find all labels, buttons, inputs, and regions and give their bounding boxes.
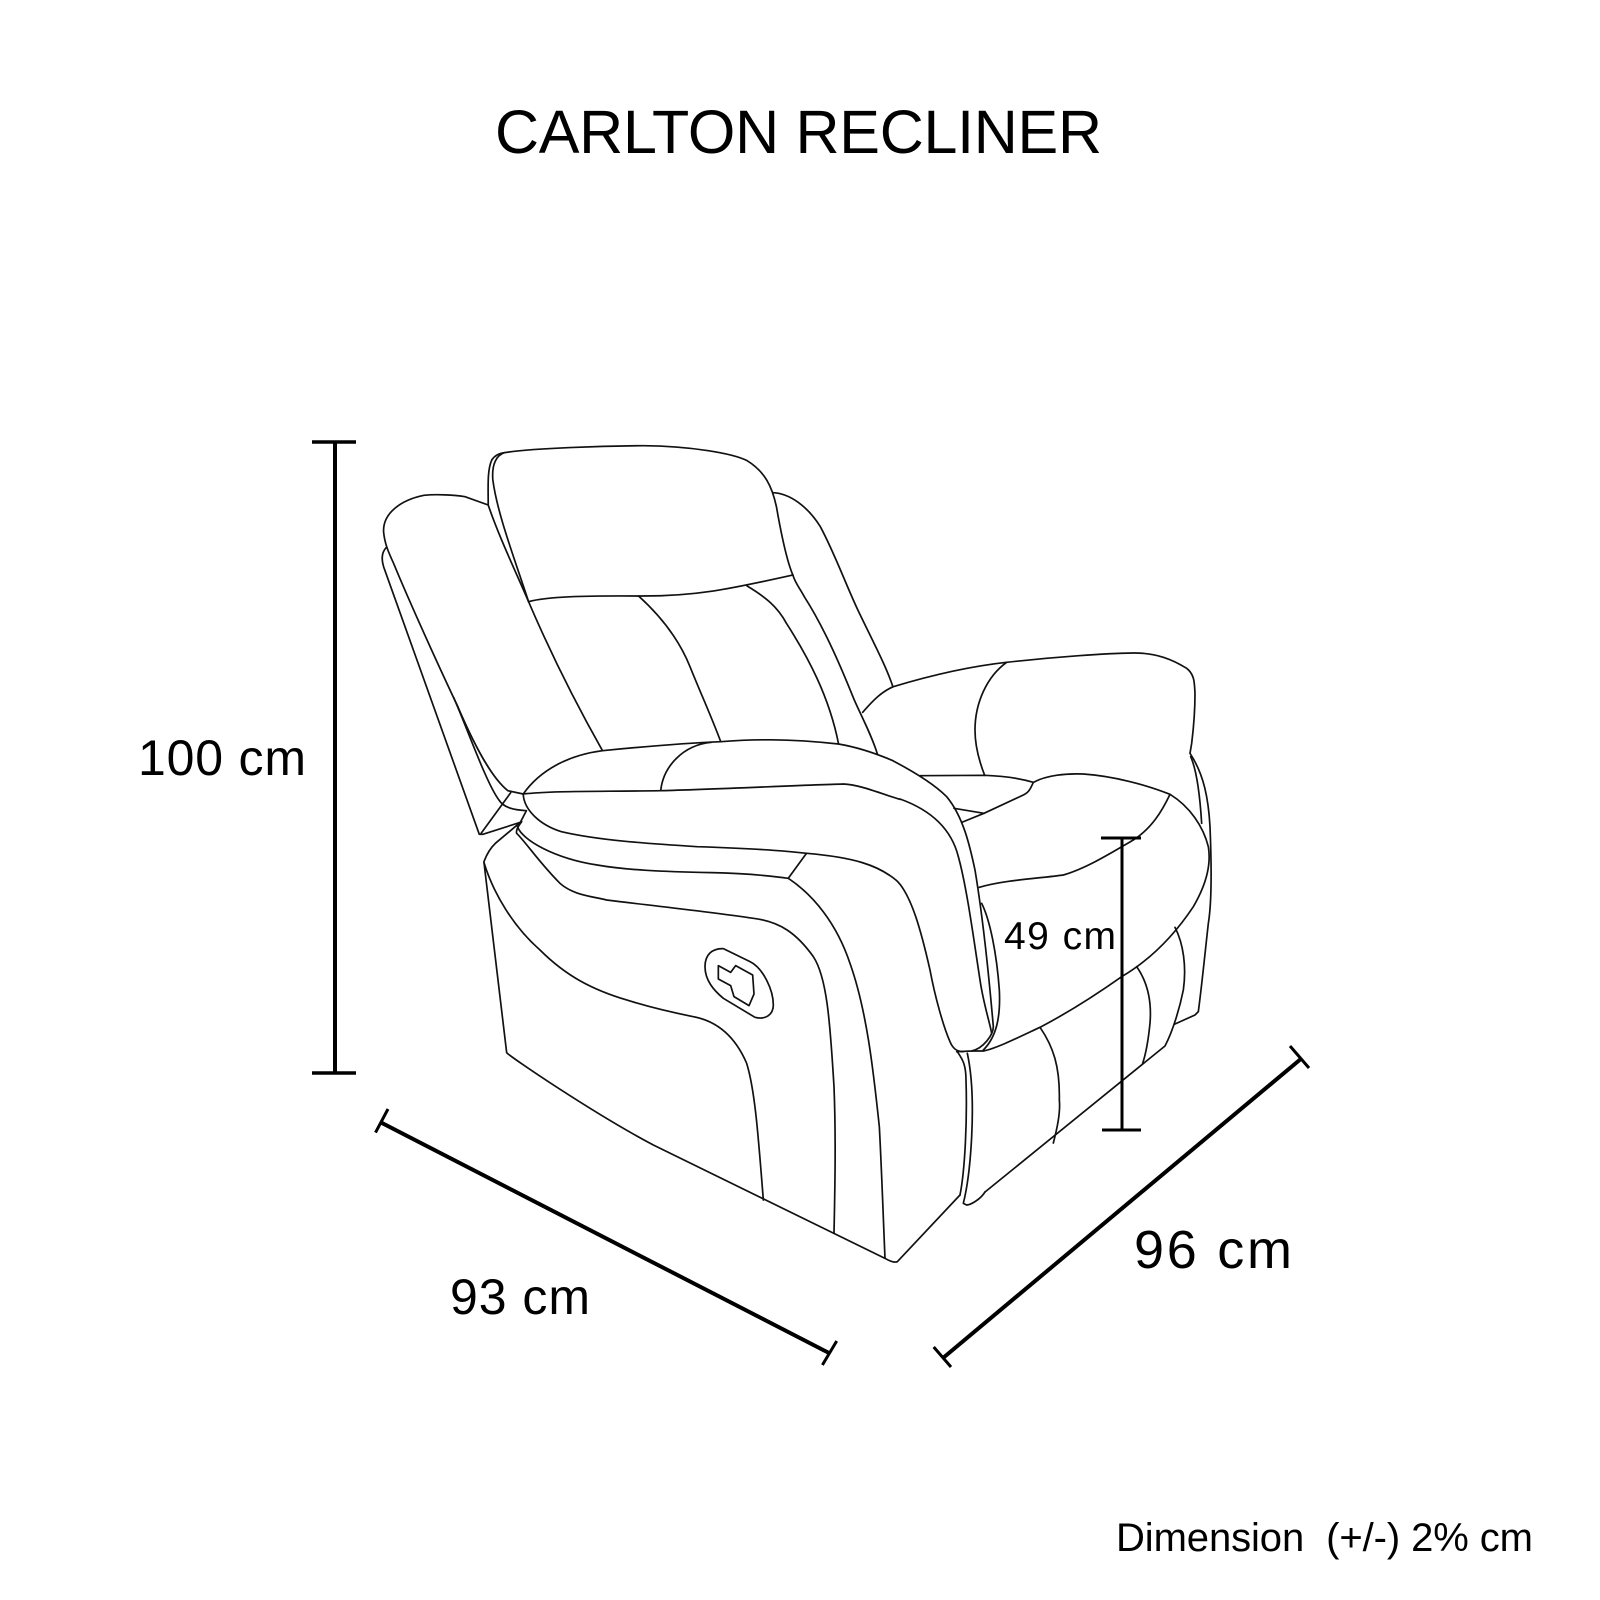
dimension: width 93 cm: 93 cm	[450, 1269, 590, 1325]
dimension: height 100 cm: 100 cm	[138, 730, 306, 786]
dimension: depth 96 cm	[934, 1046, 1309, 1367]
dimension: width 93 cm	[376, 1109, 837, 1365]
left arm side panel	[484, 822, 985, 1262]
tolerance note: Dimension (+/-) 2% cm	[1116, 1516, 1533, 1560]
right arm and seat cushion	[863, 653, 1211, 1192]
title: CARLTON RECLINER	[495, 98, 1102, 166]
recliner back and headrest	[382, 446, 900, 878]
dimension: depth 96 cm: 96 cm	[1134, 1220, 1292, 1280]
dimension: seat height 49 cm: 49 cm	[1004, 915, 1116, 958]
dimension: height 100 cm	[138, 442, 356, 1073]
icon: recline handle	[705, 949, 773, 1018]
dimension: seat height 49 cm	[1004, 838, 1141, 1130]
recliner line drawing	[382, 446, 1211, 1262]
